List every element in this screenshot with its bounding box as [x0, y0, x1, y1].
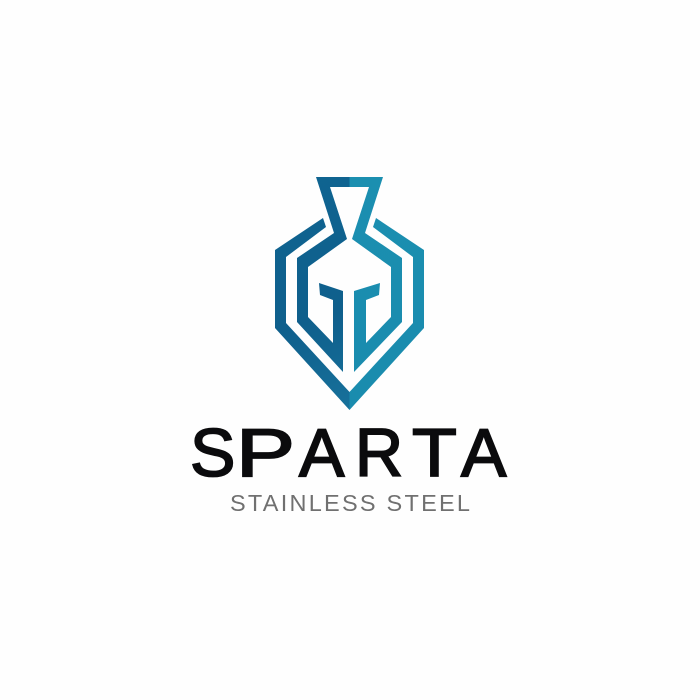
- brand name: SPARTA: A: [299, 415, 345, 491]
- helmet right half: [350, 177, 402, 372]
- icon: spartan helmet shield: [275, 177, 424, 410]
- brand name: SPARTA: S: [190, 415, 235, 491]
- tagline: STAINLESS STEEL: STAINLESS STEEL: [230, 490, 470, 516]
- helmet left half: [297, 177, 350, 372]
- brand name: SPARTA: T: [412, 415, 457, 490]
- shield right half: [350, 218, 424, 410]
- shield left half: [275, 218, 350, 410]
- brand name: SPARTA: P: [236, 415, 295, 491]
- brand name: SPARTA: A: [461, 415, 507, 491]
- brand name: SPARTA: [190, 415, 507, 491]
- brand name: SPARTA: R: [355, 415, 403, 491]
